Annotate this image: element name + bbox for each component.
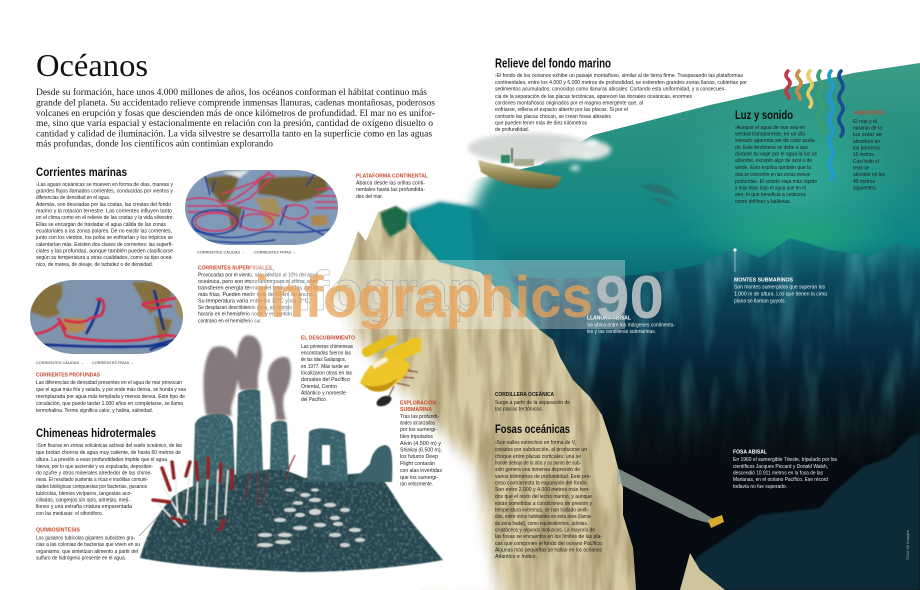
text block: crustáceos y algunos moluscos. La mayoría de [495,528,595,534]
searchlight beam [617,468,712,524]
callout: llanura abisal: LLANURA ABISAL [587,316,631,322]
map legend [36,361,134,365]
hull [360,357,410,392]
deep black trench [500,360,920,470]
text block: Además, son desviadas por las costas, las crestas del fondo [36,202,171,208]
text block: grandes flujos llamados corrientes, conducidas por vientos y [36,188,173,194]
callout: absorción [853,108,885,192]
callout: exploración submarina: Tras las profundi- [400,414,439,420]
world map: surface currents [185,170,338,254]
warm currents [187,172,338,231]
map legend: CORRIENTES FRÍAS → [254,250,296,254]
callout: plataforma continental: des del mar. [356,194,383,200]
callout: el descubrimiento: EL DESCUBRIMIENTO [301,336,355,342]
white fade of the cliff [280,285,503,590]
surface clouds [468,133,611,170]
beige mound bottom [680,553,725,590]
callout: quimiosíntesis: sulfuro de hidrógeno presente en el agua. [36,556,126,562]
text block: absorbe, excepto algo de azul o de [735,158,812,164]
ship [478,148,562,189]
watermark orange text: infographics [254,265,593,330]
callout: corrientes superficiales: Se desplazan describiendo giros, en sentido [198,305,292,311]
callout: fosa abisal: todavía no fue superado. [733,484,787,490]
teal slope behind cliff [408,202,540,330]
callout: el descubrimiento: localizaron otras en las [301,370,352,376]
callout: montes submarinos: Son montes sumergidos que superan los [734,284,825,290]
map legend: CORRIENTES CÁLIDAS → [36,361,84,365]
text block: en el clima como en el relieve de las costas y la vida silvestre. [36,215,174,221]
text block: como delfines y ballenas. [735,199,791,205]
callout: corrientes superficiales: contrario en el hemisferio sur. [198,318,262,324]
text block: y más lejos bajo el agua que en el [735,186,806,192]
callout: corrientes profundas: CORRIENTES PROFUNDAS [36,372,101,378]
text block: cia de la separación de las placas tectónicas, aparecen las dorsales oceánicas, enormes [495,94,692,100]
callout: corrientes superficiales: horario en el hemisferio norte, y en sentido [198,312,292,318]
intro paragraph: más profundas, donde los científicos aún continúan explorando [36,138,273,148]
text block: continentales, entre los 4.000 y 6.000 metros de profundidad, se extienden grandes zonas llanas, cubiertas por [495,80,747,86]
callout: cordillera oceánica: CORDILLERA OCEÁNICA [495,391,554,398]
callout: corrientes superficiales: Provocadas por el viento, sólo afectan al 10% del agua [198,272,319,278]
text block: diferencias de densidad en el agua. [36,195,110,201]
white fade at water edge [420,140,500,240]
deep submersible [708,515,724,528]
callout: corrientes profundas: reemplazada por agua más templada y menos densa. Este tipo de [36,394,185,400]
ocean scene: water body and sea floor [420,63,920,590]
cliff rock [330,206,636,590]
cold deep current [30,290,183,350]
callout: exploración submarina: dades alcanzadas [400,420,435,426]
text block: de profundidad. [495,127,529,133]
green band above mountains [685,205,905,265]
text block [495,73,747,133]
text block: hierva, por lo que asciende y es expulsada, depositan- [36,464,153,470]
text block: ›Aunque el agua de mar sea en [735,125,805,131]
callout: el descubrimiento: dorsales del Pacífico [301,377,350,383]
watermark outline text: infographics [262,259,592,322]
chimney texture [194,391,347,486]
intro paragraph: grande del planeta. Su accidentado relieve comprende inmensas llanuras, cadenas montañosas, poderosos [36,98,435,108]
callout: montes submarinos: plana se llaman guyots. [734,298,786,304]
rock outcrop [352,445,392,482]
text block: están sometidas a condiciones de presión y [495,501,592,507]
callout: corrientes superficiales: transfieren energía térmica del trópico a las zonas [198,286,318,292]
text block: profundas. El sonido viaja más rápido [735,179,817,185]
callout: llanura abisal [587,316,675,335]
heading: Chimeneas hidrotermales [36,428,156,440]
base texture [140,468,443,572]
callout: el descubrimiento: Oriental, Centro [301,384,337,390]
text block: da zona hadal), como equinodermos, actinias, [495,521,588,527]
intro paragraph: Desde su formación, hace unos 4.000 millones de años, los océanos conforman el hábitat continuo más [36,87,427,97]
watermark number: 90 [595,264,664,331]
text block: las fosas se encuentra en los límites de las pla- [495,534,602,540]
text block: junto con los vientos, los polos se enfriarían y los trópicos se [35,235,173,241]
panel: corrientes marinas [35,167,174,268]
text block: neas. El resultado sustenta a ricas e insólitas comuni- [36,477,148,483]
text block [495,440,603,560]
text block: ecuatoriales a las zonas polares. De no existir las corrientes, [36,228,172,234]
callout: corrientes profundas: termohalina. Termo significa calor, y halina, salinidad. [36,408,153,414]
hull shadow [360,378,398,392]
text block: que pueden tener más de diez kilómetros [495,120,587,126]
text block: altura. La presión a esas profundidades impide que el agua [36,457,168,463]
mountain ridges [500,238,920,480]
callout: plataforma continental: PLATAFORMA CONTINENTAL [356,174,428,180]
bow light [372,357,388,369]
image credit: ©Sol 90 Images [905,530,910,560]
text block: con las medusas: el sifonóforo. [36,511,103,517]
text block [735,125,817,205]
callout: corrientes superficiales: oceánica, pero son importantes para el clima: ellas [198,279,318,285]
panel: relieve del fondo marino [495,56,747,133]
callout: absorción: resto se [853,166,869,172]
world map: deep currents [30,280,183,365]
rock arch [307,428,348,482]
callout: fosa abisal: Marianas, en el océano Pacífico. Ese récord [733,477,828,483]
callout: corrientes profundas [36,372,187,414]
callout: exploración submarina: SUBMARINA [400,407,432,413]
callout: absorción: Casi todo el [853,159,879,165]
pointer line to tube worm [139,512,162,536]
ship hull [478,160,562,189]
text block: soleado aparenta ser de color azula- [735,138,816,144]
panel: fosas oceánicas [495,424,603,560]
callout: corrientes superficiales: más frías. Pueden medir más de 80 km de ancho. [198,292,314,298]
text block [35,182,174,268]
continental slope and shelf cliff [280,202,725,590]
callout: corrientes superficiales: CORRIENTES SUPERFICIALES [198,266,273,272]
title: Océanos [36,47,148,83]
cyan light [829,71,833,180]
text block: temperatura extremas, se han hallado anéli- [495,508,589,514]
water column [440,63,920,590]
text block: contrario las placas chocan, se crean fosas abisales [495,114,611,120]
warm deep current [34,298,182,341]
text block: dos que el resto del lecho marino, y aunque [495,494,592,500]
callout: fosa abisal [733,450,837,490]
orange light [797,71,801,99]
callout: montes submarinos: 1.000 m de altura. Los que tienen la cima [734,292,828,298]
text block: hunde debajo de la otra y su punto de sub- [495,460,581,466]
text block: Son entre 2.000 y 4.000 metros más hon- [495,487,590,493]
callout: plataforma continental: Abarca desde las orillas conti- [356,180,425,186]
intro paragraph [36,87,435,148]
callout: llanura abisal: les y las cordilleras submarinas. [587,329,656,335]
text block: ›Son valles estrechos en forma de V, [495,440,576,446]
text block: ciales y las profundas, aunque también pueden clasificarse [36,248,173,254]
callout: absorción: ABSORCIÓN [854,108,884,116]
text block: cas que componen el fondo del océano Pacífico. [495,541,603,547]
callout: absorción: absorben en [853,139,880,145]
callout: quimiosíntesis: Los gusanos tubícolas gigantes subsisten gra- [36,536,135,542]
text block: verde. Esto explica también que la [735,165,812,171]
text block: llones y una extraña criatura emparentada [36,504,133,510]
map legend [197,250,296,254]
watermark band [250,260,625,329]
text block: ciliadas, cangrejos sin ojos, almejas, mejí- [36,498,130,504]
callout: plataforma continental: nentales hasta las profundida- [356,187,425,193]
callout: cordillera oceánica: las placas tectónicas. [495,406,543,412]
yellow light [808,71,812,107]
callout: exploración submarina: bles tripulados [400,434,433,440]
text block: sión genera una inmensa depresión de [495,467,580,473]
cold currents [185,172,338,243]
callout: exploración submarina: por los sumergi- [400,427,437,433]
upper float [367,339,392,352]
callout: el descubrimiento: encontradas fueron las [301,350,351,356]
heading: Fosas oceánicas [495,424,570,436]
text block: ›Las aguas oceánicas se mueven en forma de olas, mareas y [36,182,173,188]
whales [640,184,680,207]
callout: exploración submarina: EXPLORACIÓN [400,398,436,406]
callout: quimiosíntesis: cias a las colonias de bacterias que viven en su [36,542,140,548]
text block: calentarían más. Existen dos clases de corrientes: las superfi- [36,242,173,248]
text block: marino y la rotación terrestre. Las corrientes influyen tanto [36,208,172,214]
text block: do. Este fenómeno se debe a que [735,145,808,151]
illustration: hydrothermal vents [140,335,443,572]
map legend: CORRIENTES FRÍAS → [92,361,134,365]
callout: montes submarinos: MONTES SUBMARINOS [734,278,794,284]
text block: Ellas se encargan de trasladar el agua cálida de las zonas [36,222,166,228]
main float [390,345,416,358]
callout: el descubrimiento: del Pacífico. [301,397,327,403]
text block: ›El fondo de los océanos exhibe un paisaje montañoso, similar al de tierra firme. Traspasando las plataformas [495,73,743,79]
text block: enfriarse, rellena el espacio abierto por las placas. Si por el [495,107,628,113]
callout: absorción: siguientes. [853,186,877,192]
map ocean [185,170,338,245]
callout: fosa abisal: descendió 10.911 metros en la fosa de las [733,470,823,476]
callout: montes submarinos [734,278,828,304]
text block: cordones montañosos originados por el magma emergente que, al [495,100,643,106]
text block: creados por subducción, al producirse un [495,447,587,453]
callout: exploración submarina: que los sumergi- [400,475,438,481]
text block: durante su viaje por el agua la luz se [735,152,817,158]
callout: corrientes superficiales: Su temperatura varía entre los 30°C y los -2°C. [198,298,310,304]
callout: absorción: absorbe en los [853,172,885,178]
text block: según su temperatura u otras cualidades, como su tipo oceá- [36,255,173,261]
callout: exploración submarina: Shinkai (6.500 m), [400,448,442,454]
text block: varios kilómetros de profundidad. Este pro- [495,474,591,480]
text block: do azufre y otros minerales alrededor de las chime- [36,470,152,476]
intro paragraph: cantidad y calidad de iluminación. La vida silvestre se desarrolla tanto en la superficie como en las aguas [36,128,432,138]
heading: Luz y sonido [735,110,793,122]
callout: el descubrimiento: en 1977. Más tarde se [301,364,349,370]
text block: vida se concentre en las zonas menos [735,172,810,178]
text block: aire, lo que beneficia a cetáceos [735,192,806,198]
callout: el descubrimiento: Atlántico y noroeste [301,390,346,396]
callout: fosa abisal: En 1960 el sumergible Trieste, tripulado por los [733,457,837,463]
callout: exploración submarina: Flight contarán [400,461,435,467]
text block: Atlántico e Índico. [495,553,537,560]
text block: choque entre placas corticales: una se [495,454,581,460]
callout: el descubrimiento: de las islas Galápagos, [301,357,346,363]
marker: montes submarinos [733,248,737,272]
text block: dos, entre otros habitantes en esta área (llama- [495,514,592,520]
chimneys [193,389,289,488]
undersea mountains [500,238,920,480]
text block: dades biológicas compuestas por bacterias, gusanos [36,484,147,490]
map ocean [30,280,183,354]
red light [786,71,790,98]
text block: ceso contrarresta la expansión del fondo. [495,480,588,486]
callout: absorción: 40 metros [853,179,875,185]
callout: fosa abisal: FOSA ABISAL [733,450,767,456]
illustration: yellow submersible [360,339,418,408]
heading: Corrientes marinas [36,167,127,179]
callout: cordillera oceánica [495,391,570,412]
callout: corrientes profundas: que el agua más fría y salada, y por ende más densa, se hunda y sea [36,387,187,393]
smoke plumes [204,335,291,420]
callout: llanura abisal: Se ubica entre los márgenes continenta- [587,322,675,328]
callout: el descubrimiento: Las primeras chimeneas [301,344,353,350]
navy light [839,71,843,136]
map land masses [30,282,183,342]
rocky base [140,468,443,572]
callout: exploración submarina: rán velozmente. [400,482,433,488]
light glow in water [660,90,920,270]
text block: verdad transparente, en un día [735,132,806,138]
watermark [250,259,664,331]
map legend: CORRIENTES CÁLIDAS → [197,250,245,254]
callout: exploración submarina [400,398,442,488]
callout: absorción: naranja de la [853,126,883,132]
callout: plataforma continental [356,174,428,200]
callout: exploración submarina: con alas invertidas [400,468,442,474]
clam bed [257,488,365,547]
text block: tubícolas, blenios vivíparos, langostas aco- [36,491,132,497]
callout: corrientes profundas: circulación, que puede tardar 1.000 años en completarse, se llama [36,401,184,407]
text block: que brotan chorros de agua muy caliente, de hasta 60 metros de [36,450,181,456]
callout: exploración submarina: los futuros Deep [400,454,438,460]
green light [818,71,822,133]
callout: quimiosíntesis: organismo, que sintetizan alimento a partir del [36,549,138,555]
callout: corrientes superficiales [198,266,319,324]
callout: absorción: luz solar se [853,132,882,138]
text block: ›Son fisuras en zonas volcánicas activas del suelo oceánico, de las [36,443,182,449]
heading: Relieve del fondo marino [495,56,611,70]
callout: exploración submarina: Alvin (4.500 m) y [400,441,441,447]
callout: fosa abisal: científicos Jacques Piccard y Donald Walsh, [733,464,828,470]
text block: Algunas más pequeñas se hallan en los océanos [495,548,602,554]
chart: wavy light absorption lines [786,71,843,180]
text block [36,443,182,517]
ship superstructure [501,155,510,163]
callout: corrientes profundas: Las diferencias de densidad presentes en el agua de mar provocan [36,380,182,386]
text block: nico, de marea, de oleaje, de turbidez o de densidad. [36,262,153,268]
thruster camera [375,394,393,408]
intro paragraph: volcanes en erupción y fosas que descienden más de once kilómetros de profundidad. El mar no es unifor- [36,108,435,118]
callout: el descubrimiento [301,336,355,403]
callout: absorción: los primeros [853,146,880,152]
text block: sedimentos acumulados, conocidas como llanuras abisales. Cortando esta uniformidad, y a consecuen- [495,86,726,92]
callout: quimiosíntesis: QUIMIOSÍNTESIS [36,526,81,534]
callout: cordillera oceánica: Surge a partir de la separación de [495,400,570,406]
intro paragraph: me, sino que varía espacial y estacionalmente en relación con la presión, cantidad de oxígeno disuelto o [36,118,433,128]
panel: chimeneas hidrotermales [36,428,182,517]
map land masses [205,170,328,232]
teal shelf top [412,203,476,270]
callout: absorción: 15 metros. [853,152,875,158]
green shelf top [380,206,408,237]
rear frame [385,360,418,386]
giant tube worms [153,455,295,530]
cliff strata [330,206,636,590]
callout: absorción: El rojo y el [853,119,877,125]
panel: luz y sonido [735,110,817,205]
callout: quimiosíntesis [36,526,140,562]
abyssal hill [680,433,920,590]
